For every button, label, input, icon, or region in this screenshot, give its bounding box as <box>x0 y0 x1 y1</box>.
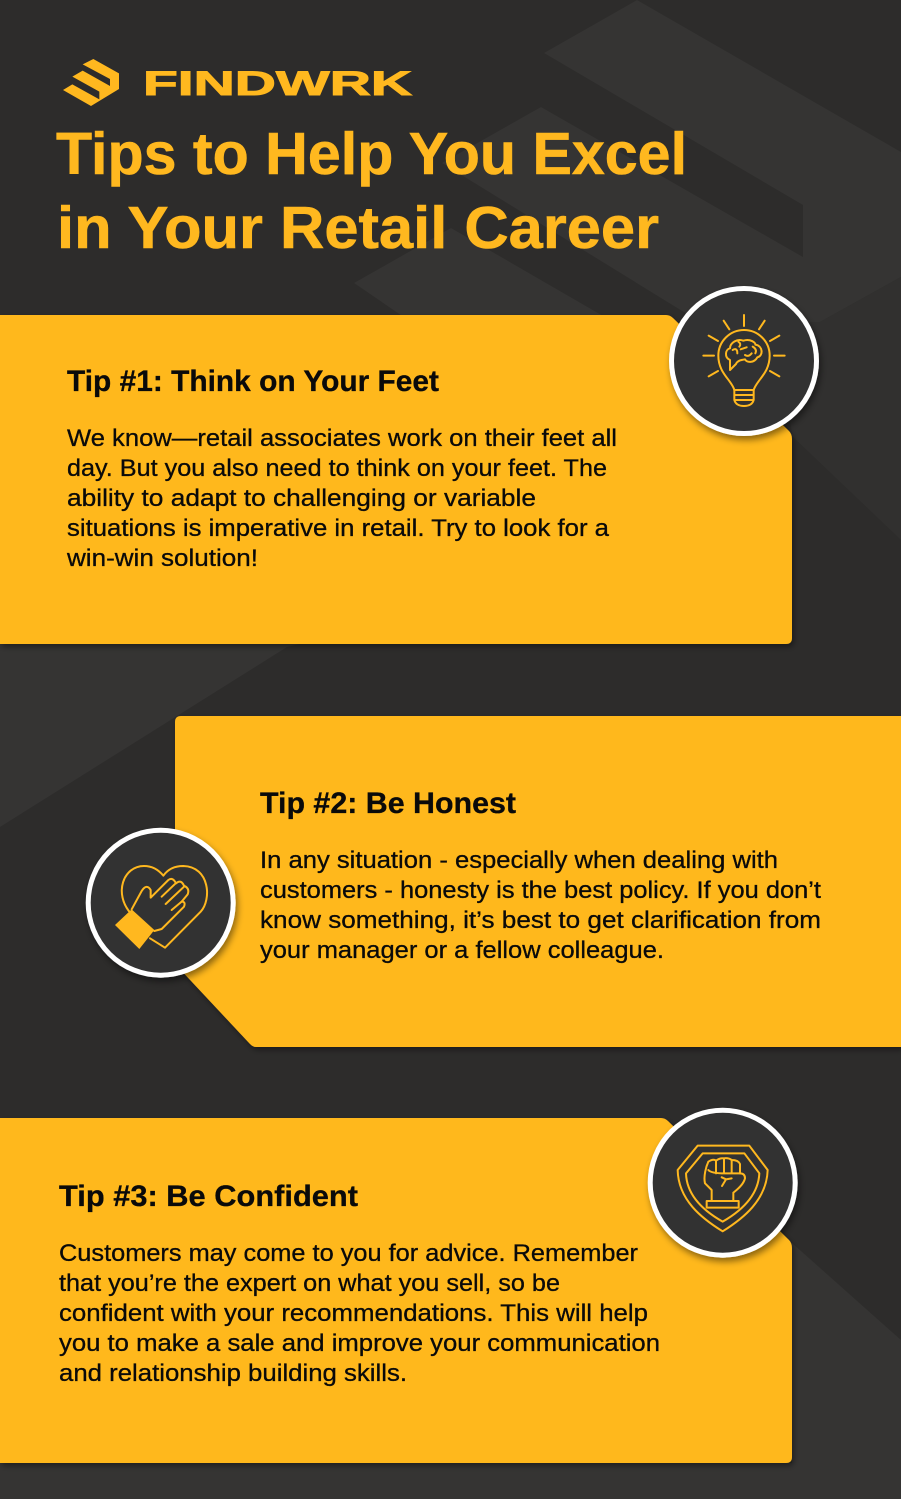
logo wordmark: FINDWRK <box>143 65 413 103</box>
title: in Your Retail Career <box>57 195 659 261</box>
panel: tip 2 <box>88 716 901 1047</box>
text block: tip 2 body: your manager or a fellow colleague. <box>260 937 664 964</box>
card background <box>175 716 901 1047</box>
logo: FINDWRK <box>63 59 413 106</box>
text block: tip 1 body <box>66 425 617 572</box>
text block: tip 1 body: ability to adapt to challenging or variable <box>67 485 536 512</box>
text block: tip 2 body <box>260 847 821 964</box>
text block: tip 3 body <box>59 1240 660 1387</box>
panel: tip 3 <box>0 1110 795 1463</box>
icon: light bulb with brain <box>672 288 816 434</box>
text block: tip 2 body: In any situation - especially when dealing with <box>260 847 778 874</box>
panel: tip 1 <box>0 288 816 644</box>
icon: hand on heart <box>88 830 233 975</box>
text block: tip 1 body: win-win solution! <box>66 545 258 572</box>
heading: tip 2: Tip #2: Be Honest <box>260 787 516 820</box>
icon: logo mark <box>63 59 119 106</box>
icon: fist on shield <box>650 1110 795 1255</box>
text block: tip 3 body: and relationship building skills. <box>59 1360 407 1387</box>
text block: tip 3 body: confident with your recommendations. This will help <box>59 1300 648 1327</box>
text block: tip 1 body: situations is imperative in retail. Try to look for a <box>67 515 610 542</box>
card background <box>0 1118 792 1463</box>
text block: tip 1 body: We know—retail associates work on their feet all <box>67 425 617 452</box>
title: Tips to Help You Excel <box>56 121 687 187</box>
text block: tip 2 body: customers - honesty is the best policy. If you don’t <box>260 877 821 904</box>
text block: tip 1 body: day. But you also need to think on your feet. The <box>67 455 607 482</box>
title <box>56 121 687 261</box>
text block: tip 3 body: Customers may come to you for advice. Remember <box>59 1240 638 1267</box>
card background <box>0 315 792 644</box>
heading: tip 3: Tip #3: Be Confident <box>59 1180 358 1213</box>
text block: tip 2 body: know something, it’s best to get clarification from <box>260 907 821 934</box>
text block: tip 3 body: you to make a sale and improve your communication <box>59 1330 660 1357</box>
heading: tip 1: Tip #1: Think on Your Feet <box>67 365 439 398</box>
text block: tip 3 body: that you’re the expert on what you sell, so be <box>59 1270 560 1297</box>
